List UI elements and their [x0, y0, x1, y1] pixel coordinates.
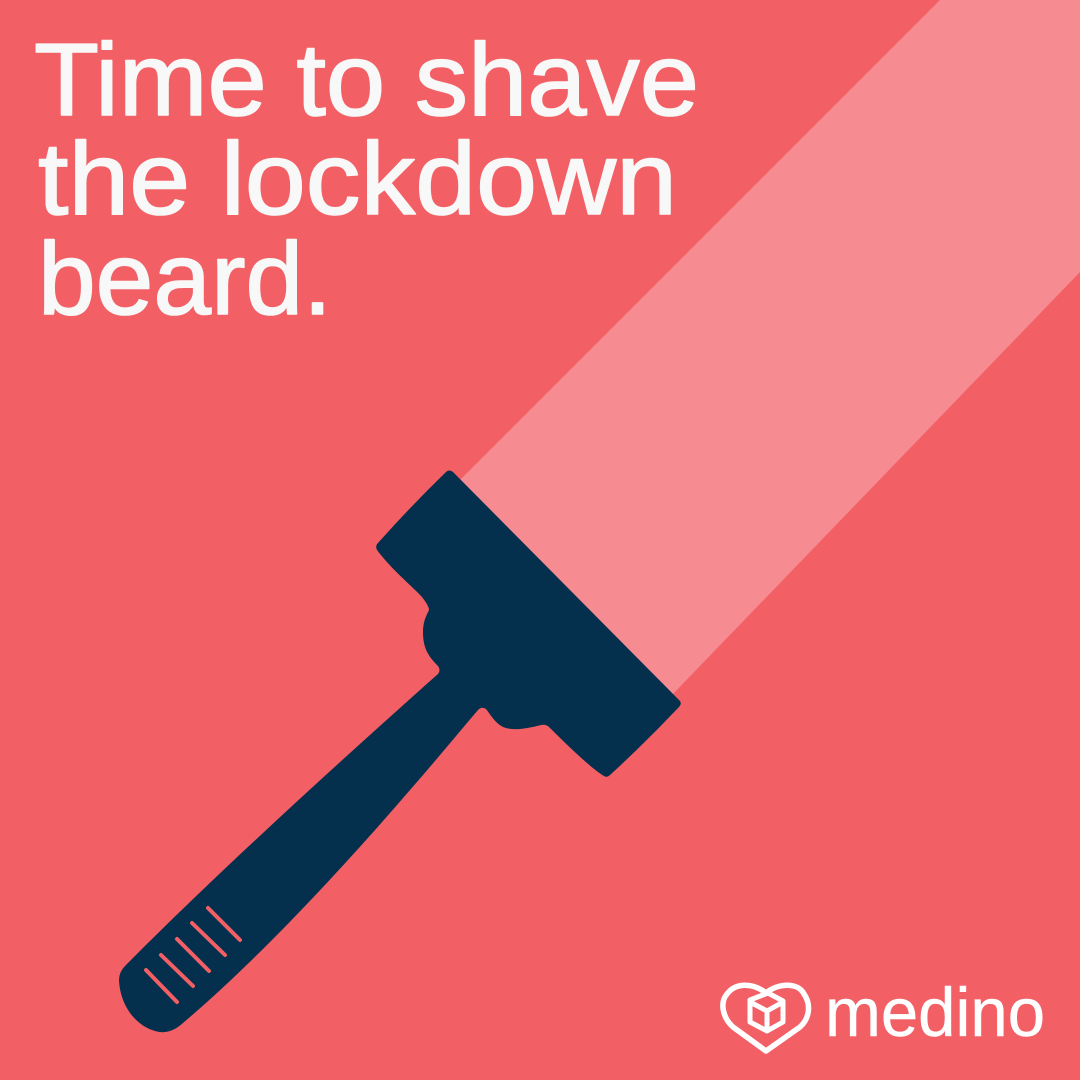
title: the lockdown: [38, 121, 677, 236]
title: [34, 22, 699, 336]
icon: heart with box: [723, 985, 809, 1051]
shaved stripe: [460, 0, 1080, 695]
title: Time to shave: [34, 22, 699, 137]
logo: medino: [723, 974, 1045, 1051]
grip lines: [146, 908, 240, 1002]
wordmark: medino: [825, 974, 1045, 1051]
title: beard.: [38, 221, 332, 336]
razor body: [119, 470, 681, 1032]
icon: razor: [119, 470, 681, 1032]
